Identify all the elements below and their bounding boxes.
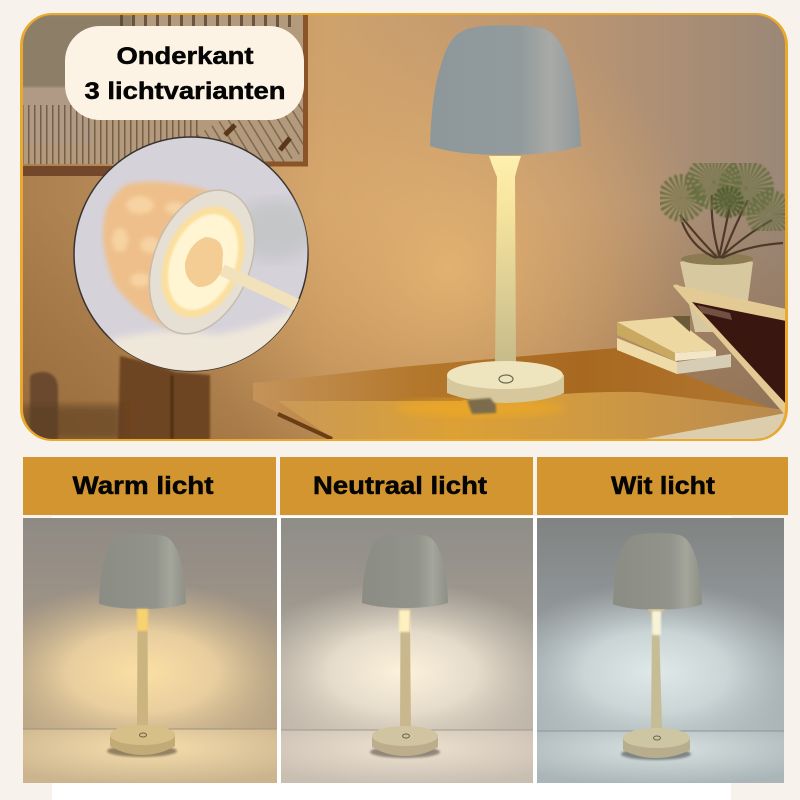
shade seen from below bbox=[103, 182, 222, 332]
wall bbox=[22, 14, 786, 440]
plant bbox=[671, 169, 783, 332]
inset: lamp underside circle bbox=[74, 137, 315, 375]
lamp shade bbox=[430, 25, 581, 155]
lamp stem bbox=[398, 610, 411, 728]
wall art frame bbox=[23, 15, 308, 176]
panel: warm light photo bbox=[23, 518, 277, 783]
lamp neck and stem bbox=[489, 156, 521, 365]
light ring bbox=[160, 206, 246, 318]
panel: neutral light photo bbox=[281, 518, 533, 783]
panel: white light header bbox=[537, 457, 788, 515]
lamp stem bbox=[136, 609, 149, 727]
laptop bbox=[640, 284, 786, 440]
plant pot bbox=[680, 257, 753, 332]
panel: white light header: Wit licht bbox=[611, 472, 716, 500]
panel: hero photo with lamp on desk bbox=[22, 14, 800, 440]
lamp base bbox=[447, 375, 564, 403]
desk bbox=[253, 348, 800, 440]
plant foliage bbox=[671, 169, 781, 225]
lamp base bbox=[372, 736, 438, 756]
lamp light pool bbox=[395, 399, 565, 417]
white backing strip bbox=[52, 516, 731, 800]
floor bbox=[23, 729, 277, 783]
lamp shade bbox=[362, 534, 448, 608]
lamp stem bbox=[222, 270, 300, 306]
panel: warm light header bbox=[23, 457, 276, 515]
panel: neutral light header bbox=[280, 457, 533, 515]
lamp shade bbox=[613, 533, 702, 610]
plant branches bbox=[680, 195, 783, 258]
floor bbox=[281, 730, 533, 773]
panel: white light photo bbox=[537, 518, 784, 783]
floor bbox=[537, 731, 784, 783]
callout: title bubble bbox=[65, 26, 304, 120]
lamp shade bbox=[99, 534, 186, 609]
chair bbox=[22, 356, 210, 440]
panel: neutral light header: Neutraal licht bbox=[313, 472, 488, 500]
title line 1: Onderkant bbox=[116, 43, 254, 70]
lamp foot bbox=[467, 398, 496, 414]
lamp bbox=[430, 25, 581, 414]
lamp base bbox=[623, 738, 690, 758]
lamp stem bbox=[648, 609, 665, 728]
panel: warm light header: Warm licht bbox=[72, 472, 214, 500]
title line 2: 3 lichtvarianten bbox=[84, 78, 286, 105]
books bbox=[617, 316, 731, 374]
lamp base bbox=[110, 735, 175, 755]
lamp neck bbox=[185, 237, 223, 287]
shade rim bbox=[148, 189, 256, 335]
